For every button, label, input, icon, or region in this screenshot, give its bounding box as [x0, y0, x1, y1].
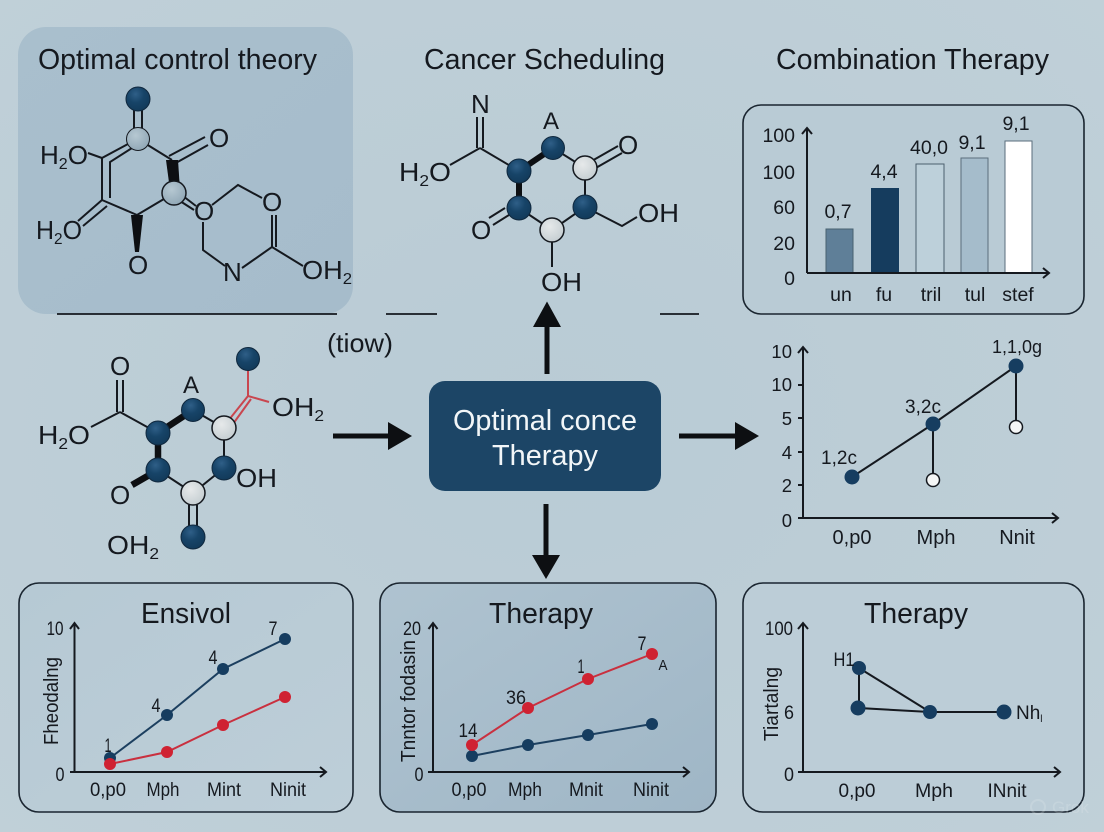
molecule: optimal control — [36, 87, 352, 288]
chart labels: 6 — [784, 703, 794, 724]
molecule: optimal control: O — [128, 250, 148, 280]
bar chart axes — [802, 128, 1049, 278]
bar chart labels: 0 — [784, 268, 795, 290]
axes — [798, 347, 1058, 523]
axes — [70, 623, 326, 777]
heading: therapy: Therapy — [489, 598, 593, 630]
panel: bar chart — [743, 105, 1084, 314]
chart labels: 20 — [403, 619, 421, 640]
arrow: right from molecule — [333, 422, 412, 450]
molecule: cancer scheduling: A — [543, 108, 559, 135]
heading: optimal control theory: Optimal control theory — [38, 44, 317, 76]
bar chart labels: 9,1 — [958, 132, 986, 154]
chart labels: 4 — [208, 648, 218, 669]
molecule: optimal control: H — [36, 215, 55, 245]
molecule: left centre: OH — [272, 392, 311, 422]
panel: therapy red/blue chart — [380, 583, 716, 812]
chart labels: Ninit — [270, 780, 307, 801]
chart labels: Mnit — [569, 780, 604, 801]
label: flow: (tiow) — [327, 328, 393, 358]
heading: ensivol: Ensivol — [141, 598, 231, 630]
chart labels: 10 — [46, 619, 64, 640]
bar chart labels: 4,4 — [870, 161, 898, 183]
molecule: left centre: 2 — [149, 546, 159, 563]
chart labels: 1 — [104, 736, 112, 757]
molecule: left centre — [38, 348, 324, 563]
heading: combination therapy: Combination Therapy — [776, 44, 1049, 76]
chart labels: Nh — [1016, 703, 1040, 724]
molecule: optimal control: O — [63, 215, 82, 245]
molecule: optimal control: 2 — [343, 271, 352, 288]
chart labels: 100 — [765, 619, 793, 640]
chart labels — [761, 619, 1043, 802]
chart labels: 0 — [414, 765, 424, 786]
central box: optimal therapy: Therapy — [492, 440, 598, 472]
molecule: left centre: 2 — [58, 436, 68, 453]
molecule: optimal control: H — [40, 140, 59, 170]
chart labels: 0 — [782, 510, 792, 531]
chart labels: Nnit — [999, 527, 1035, 549]
molecule: optimal control: 2 — [54, 231, 63, 248]
panel: therapy right chart — [743, 583, 1084, 812]
bar chart labels: 9,1 — [1002, 113, 1030, 135]
bar chart labels: tul — [965, 284, 985, 306]
chart labels: 1,2c — [821, 448, 857, 469]
chart labels: 36 — [506, 688, 526, 709]
chart labels: Mph — [508, 780, 542, 801]
chart labels: Ninit — [633, 780, 670, 801]
chart labels: INnit — [988, 781, 1027, 802]
chart labels: 4 — [152, 696, 161, 717]
heading: therapy: Therapy — [864, 598, 968, 630]
molecule: optimal control: O — [194, 196, 214, 226]
chart labels: A — [658, 657, 668, 674]
molecule: optimal control: OH — [302, 255, 341, 285]
molecule: left centre: 2 — [314, 408, 324, 425]
chart labels: Fheodalng — [41, 657, 63, 745]
molecule: cancer scheduling: H — [399, 157, 418, 187]
molecule: cancer scheduling: OH — [638, 198, 679, 228]
chart labels: Mph — [917, 527, 955, 549]
chart labels: Mph — [915, 781, 953, 802]
chart labels: Mph — [146, 780, 180, 801]
bar chart labels: tril — [921, 284, 941, 306]
bar chart labels: stef — [1002, 284, 1034, 306]
molecule: optimal control: O — [68, 140, 88, 170]
chart labels: H1 — [834, 650, 854, 671]
panel: optimal control theory — [18, 27, 353, 314]
chart labels: 1,1,0g — [992, 337, 1042, 357]
blue series — [104, 633, 291, 764]
molecule: optimal control: N — [223, 257, 242, 287]
chart labels: 0,p0 — [90, 780, 126, 801]
molecule: cancer scheduling — [399, 89, 679, 297]
bar chart labels — [762, 113, 1034, 306]
bars — [826, 141, 1032, 273]
series — [850, 661, 1012, 720]
chart labels — [771, 337, 1042, 549]
divider line left — [57, 313, 699, 315]
bar chart labels: 60 — [773, 197, 795, 219]
molecule: optimal control: 2 — [59, 156, 68, 173]
panel: ensivol chart — [19, 583, 353, 812]
molecule: cancer scheduling: O — [471, 215, 491, 245]
molecule: left centre: O — [110, 480, 130, 510]
chart labels: 0 — [784, 765, 794, 786]
chart labels: 4 — [782, 442, 792, 463]
watermark — [1031, 798, 1089, 817]
chart labels: 2 — [782, 475, 792, 496]
data points — [844, 358, 1024, 486]
bar chart labels: 100 — [762, 162, 795, 184]
chart labels: 0 — [56, 765, 64, 786]
molecule: optimal control: O — [262, 187, 282, 217]
chart labels: 10 — [771, 374, 792, 395]
red series — [466, 648, 658, 751]
chart labels: 5 — [782, 408, 792, 429]
line chart: right middle — [771, 337, 1058, 549]
bar chart labels: 20 — [773, 233, 795, 255]
red series — [104, 691, 291, 770]
chart labels: 7 — [268, 619, 278, 640]
chart labels — [41, 619, 307, 801]
molecule: cancer scheduling: N — [471, 89, 490, 119]
bar chart labels: 40,0 — [910, 137, 948, 159]
chart labels: 7 — [638, 634, 646, 655]
chart labels: 0,p0 — [833, 527, 871, 549]
chart labels: 3,2c — [905, 397, 941, 418]
chart labels — [398, 619, 670, 801]
molecule: left centre: A — [183, 372, 199, 399]
arrow: right to chart — [679, 422, 759, 450]
chart labels: 0,p0 — [838, 781, 876, 802]
molecule: left centre: OH — [236, 463, 277, 493]
molecule: left centre: OH — [107, 530, 146, 560]
heading: cancer scheduling: Cancer Scheduling — [424, 44, 665, 76]
molecule: left centre: O — [110, 351, 130, 381]
blue series — [466, 718, 658, 762]
chart labels: Tiartalng — [761, 667, 783, 741]
central box: optimal therapy — [429, 381, 661, 491]
watermark: Grok — [1052, 798, 1089, 817]
arrow: up to molecule — [533, 302, 561, 374]
bar chart labels: un — [830, 284, 852, 306]
chart labels: l — [1040, 714, 1043, 725]
molecule: cancer scheduling: O — [618, 130, 638, 160]
molecule: cancer scheduling: 2 — [419, 173, 429, 190]
chart labels: Mint — [207, 780, 242, 801]
molecule: cancer scheduling: O — [429, 157, 451, 187]
bar chart labels: 100 — [762, 125, 795, 147]
bar chart labels: 0,7 — [824, 201, 852, 223]
series lines — [852, 366, 1016, 480]
molecule: left centre: H — [38, 420, 57, 450]
arrow: down to panel — [532, 504, 560, 579]
molecule: optimal control: O — [209, 123, 229, 153]
axes — [428, 623, 689, 777]
axes — [798, 623, 1060, 777]
chart labels: 1 — [578, 657, 584, 678]
chart labels: 10 — [771, 341, 792, 362]
chart labels: 14 — [458, 721, 478, 742]
molecule: cancer scheduling: OH — [541, 267, 582, 297]
bar chart labels: fu — [876, 284, 892, 306]
molecule: left centre: O — [68, 420, 90, 450]
chart labels: 0,p0 — [452, 780, 486, 801]
central box: optimal therapy: Optimal conce — [453, 405, 637, 437]
chart labels: Tnntor fodasin — [398, 640, 420, 762]
